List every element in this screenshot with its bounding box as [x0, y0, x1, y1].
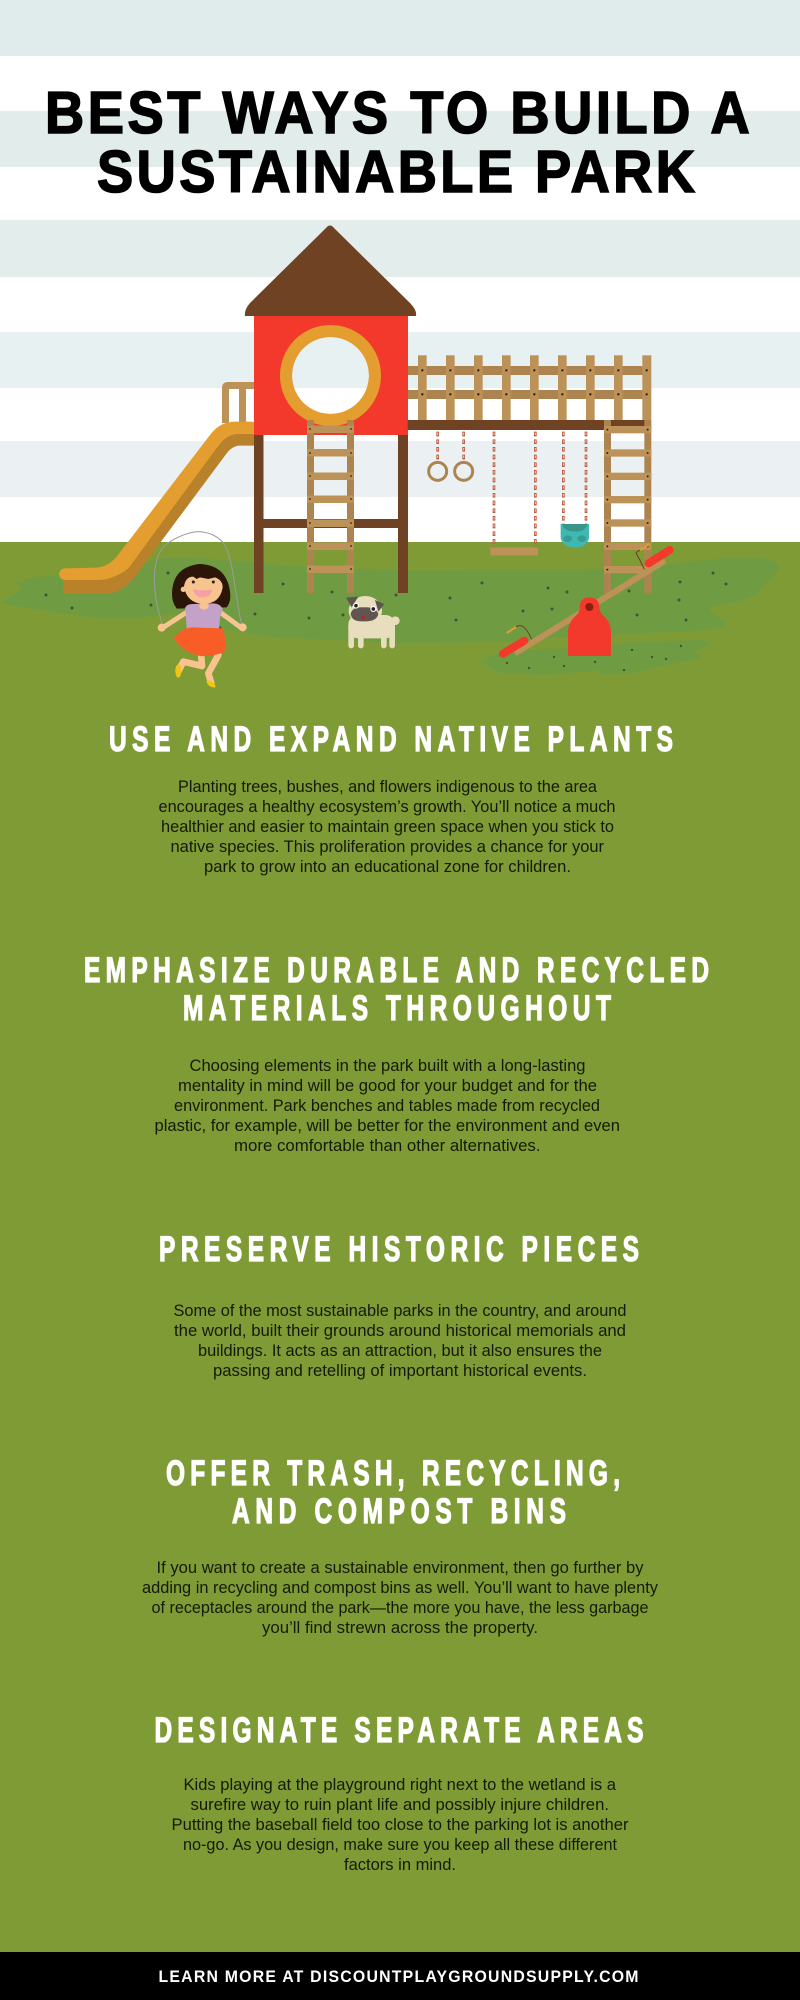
swing set: beam, rings, swings, ladder	[408, 420, 670, 656]
grass patch: main	[0, 557, 779, 643]
neck and face	[199, 602, 209, 610]
footer bar	[0, 1952, 800, 2000]
heading: native plants: USE AND EXPAND NATIVE PLANTS	[109, 721, 673, 759]
heading: trash and recycling bins	[166, 1455, 620, 1531]
heading: trash and recycling bins: AND COMPOST BINS	[232, 1493, 566, 1531]
tower red wall with round window	[254, 316, 408, 435]
body: historic pieces: Some of the most sustainable parks in the country, and around	[174, 1302, 626, 1320]
body: durable materials: mentality in mind will be good for your budget and for the	[178, 1077, 597, 1095]
body: native plants: healthier and easier to maintain green space when you stick to	[161, 818, 614, 836]
grass patch: under seesaw	[480, 640, 708, 675]
slide	[59, 422, 258, 593]
grass specks	[44, 572, 728, 671]
main title: BEST WAYS TO BUILD A	[45, 81, 750, 147]
body: trash and recycling bins: adding in recycling and compost bins as well. You’ll want to have plenty	[142, 1579, 659, 1597]
jump rope	[154, 532, 243, 632]
fence	[408, 355, 651, 420]
toddler bucket swing	[561, 432, 589, 547]
body: separate areas: factors in mind.	[344, 1856, 456, 1874]
shoes	[175, 664, 181, 678]
footer bar: LEARN MORE AT DISCOUNTPLAYGROUNDSUPPLY.COM	[158, 1968, 638, 1986]
body: separate areas	[172, 1776, 629, 1874]
body: durable materials: more comfortable than other alternatives.	[234, 1137, 540, 1155]
skirt	[174, 627, 226, 656]
tower posts	[254, 435, 408, 593]
gymnastic rings	[429, 432, 473, 480]
body: separate areas: surefire way to ruin plant life and possibly injure children.	[190, 1796, 609, 1814]
sky background with stripes	[0, 0, 800, 545]
slide back railing	[222, 382, 254, 423]
ground	[0, 542, 800, 1952]
girl jumping rope	[154, 532, 247, 689]
body: historic pieces	[174, 1302, 626, 1380]
body: durable materials: Choosing elements in the park built with a long-lasting	[190, 1057, 586, 1075]
body: durable materials	[154, 1057, 620, 1155]
body: durable materials: environment. Park benches and tables made from recycled	[174, 1097, 600, 1115]
hair	[172, 564, 230, 609]
pug dog	[346, 596, 400, 648]
arms	[163, 613, 242, 628]
heading: durable materials	[84, 952, 709, 1028]
mouth	[193, 589, 212, 597]
body: native plants: Planting trees, bushes, and flowers indigenous to the area	[178, 778, 598, 796]
right ladder	[604, 420, 651, 593]
body: native plants: encourages a healthy ecosystem’s growth. You’ll notice a much	[158, 798, 616, 816]
legs	[179, 653, 218, 683]
body: durable materials: plastic, for example, will be better for the environment and even	[154, 1117, 620, 1135]
body: separate areas: no-go. As you design, make sure you keep all these different	[183, 1836, 617, 1854]
swing beam	[408, 420, 645, 430]
body: native plants: native species. This proliferation provides a chance for your	[170, 838, 604, 856]
body: historic pieces: passing and retelling of important historical events.	[213, 1362, 587, 1380]
body: trash and recycling bins: If you want to create a sustainable environment, then go further by	[156, 1559, 644, 1577]
body: trash and recycling bins: of receptacles around the park—the more you have, the less garbage	[152, 1599, 648, 1617]
tower ladder	[307, 420, 354, 593]
heading: separate areas: DESIGNATE SEPARATE AREAS	[154, 1712, 644, 1750]
heading: historic pieces: PRESERVE HISTORIC PIECES	[159, 1231, 639, 1269]
tower roof	[245, 226, 416, 316]
round window ring	[286, 331, 375, 420]
heading: trash and recycling bins: OFFER TRASH, RECYCLING,	[166, 1455, 620, 1493]
body: separate areas: Putting the baseball field too close to the parking lot is another	[172, 1816, 629, 1834]
body: historic pieces: the world, built their grounds around historical memorials and	[174, 1322, 626, 1340]
body: native plants	[158, 778, 616, 876]
seesaw	[503, 544, 670, 656]
body: trash and recycling bins: you’ll find strewn across the property.	[262, 1619, 538, 1637]
body: separate areas: Kids playing at the playground right next to the wetland is a	[184, 1776, 617, 1794]
body: trash and recycling bins	[142, 1559, 659, 1637]
body: native plants: park to grow into an educational zone for children.	[204, 858, 571, 876]
heading: durable materials: EMPHASIZE DURABLE AND RECYCLED	[84, 952, 709, 990]
shirt	[185, 603, 223, 629]
body: historic pieces: buildings. It acts as an attraction, but it also ensures the	[198, 1342, 602, 1360]
flat swing	[490, 432, 538, 555]
main title	[45, 81, 750, 206]
heading: durable materials: MATERIALS THROUGHOUT	[183, 990, 611, 1028]
main title: SUSTAINABLE PARK	[97, 140, 695, 206]
